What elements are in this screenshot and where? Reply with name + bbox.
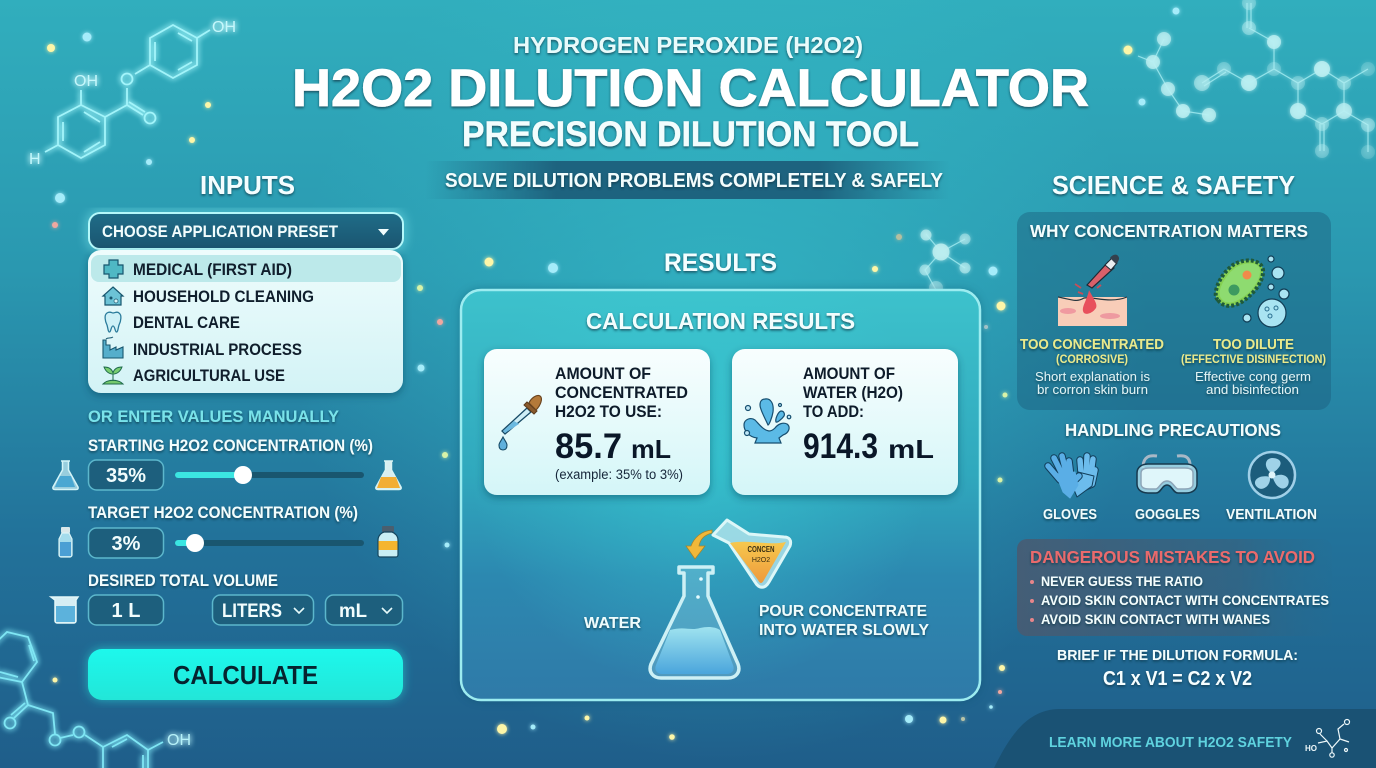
preset: agricultural: AGRICULTURAL USE bbox=[133, 367, 285, 385]
main title: H2O2 DILUTION CALCULATOR bbox=[292, 59, 1089, 118]
dilution formula: C1 x V1 = C2 x V2 bbox=[1103, 668, 1252, 690]
icon: small molecule: HO bbox=[1305, 744, 1317, 753]
card: concentrated h2o2 bbox=[484, 349, 710, 495]
text: too dilute: TOO DILUTE bbox=[1213, 337, 1294, 353]
desired volume control: mL bbox=[339, 601, 367, 622]
label: gloves: GLOVES bbox=[1043, 507, 1097, 523]
card: concentrated h2o2: AMOUNT OF bbox=[555, 364, 651, 383]
icon: skin burn bbox=[1058, 255, 1127, 326]
card: water: 914.3 bbox=[803, 427, 878, 466]
preset dropdown list bbox=[88, 250, 403, 393]
preset: industrial: INDUSTRIAL PROCESS bbox=[133, 341, 302, 359]
molecule: top left: OH bbox=[74, 73, 98, 90]
icon: tilted concentrate flask bbox=[713, 520, 791, 587]
icon: factory bbox=[103, 337, 123, 358]
icon: plant bbox=[103, 367, 123, 384]
icon: ventilation fan bbox=[1249, 452, 1295, 498]
starting concentration control: 35% bbox=[106, 465, 146, 487]
icon: tilted concentrate flask: CONCEN bbox=[748, 545, 775, 554]
card: water: WATER (H2O) bbox=[803, 383, 903, 402]
inputs heading: INPUTS bbox=[200, 170, 295, 200]
tagline band: SOLVE DILUTION PROBLEMS COMPLETELY & SAFELY bbox=[445, 170, 944, 192]
text: too concentrated: Short explanation is bbox=[1035, 370, 1150, 384]
molecule: bottom left bbox=[0, 632, 191, 768]
text: too concentrated: br corron skin burn bbox=[1037, 383, 1148, 397]
preset select: CHOOSE APPLICATION PRESET bbox=[102, 223, 338, 241]
molecule: top left bbox=[29, 19, 236, 168]
card: water: mL bbox=[888, 434, 934, 464]
label: water: WATER bbox=[584, 615, 641, 632]
starting concentration control bbox=[53, 437, 401, 490]
header tool name: PRECISION DILUTION TOOL bbox=[462, 115, 919, 154]
science heading: SCIENCE & SAFETY bbox=[1052, 170, 1295, 200]
icon: tilted concentrate flask: H2O2 bbox=[752, 557, 770, 564]
target concentration control: TARGET H2O2 CONCENTRATION (%) bbox=[88, 504, 358, 522]
panel: handling precautions bbox=[1043, 420, 1317, 523]
header subtitle: HYDROGEN PEROXIDE (H2O2) bbox=[513, 32, 863, 58]
panel: dangerous mistakes bbox=[1017, 539, 1332, 636]
panel: inputs bbox=[51, 170, 403, 700]
panel: dangerous mistakes: DANGEROUS MISTAKES TO AVOID bbox=[1030, 547, 1315, 567]
preset select bbox=[89, 213, 403, 249]
preset: household: HOUSEHOLD CLEANING bbox=[133, 288, 314, 306]
floating particles bbox=[47, 8, 1180, 740]
molecule: top left: OH bbox=[212, 19, 236, 36]
label: pour instruction: POUR CONCENTRATE bbox=[759, 603, 927, 620]
label: pour instruction: INTO WATER SLOWLY bbox=[759, 622, 929, 639]
panel: science and safety bbox=[1017, 170, 1332, 690]
illustration: pouring concentrate into water bbox=[584, 520, 929, 678]
preset: dental: DENTAL CARE bbox=[133, 314, 240, 332]
card: water: TO ADD: bbox=[803, 402, 864, 421]
icon: goggles bbox=[1137, 456, 1197, 493]
card: concentrated h2o2: H2O2 TO USE: bbox=[555, 402, 662, 421]
text: too concentrated bbox=[1020, 337, 1164, 397]
icon: small molecule bbox=[1305, 720, 1350, 757]
panel: dangerous mistakes: AVOID SKIN CONTACT WITH WANES bbox=[1041, 612, 1270, 627]
panel: calculation results bbox=[461, 290, 980, 700]
icon: house bbox=[103, 287, 123, 305]
preset: medical: MEDICAL (FIRST AID) bbox=[133, 261, 292, 279]
text: too concentrated: (CORROSIVE) bbox=[1056, 354, 1128, 366]
dilution formula: BRIEF IF THE DILUTION FORMULA: bbox=[1057, 648, 1298, 664]
card: concentrated h2o2: 85.7 bbox=[555, 427, 622, 466]
panel: dangerous mistakes: AVOID SKIN CONTACT WITH CONCENTRATES bbox=[1041, 593, 1329, 608]
results panel heading: CALCULATION RESULTS bbox=[586, 308, 855, 334]
desired volume control: 1 L bbox=[112, 600, 140, 622]
icon: germ and bubbles bbox=[1216, 256, 1289, 327]
target concentration control: 3% bbox=[112, 533, 141, 555]
label: pour instruction bbox=[759, 603, 929, 639]
text: too dilute: and bisinfection bbox=[1206, 383, 1299, 397]
desired volume control: DESIRED TOTAL VOLUME bbox=[88, 572, 278, 590]
dilution formula bbox=[1057, 648, 1298, 690]
text: too concentrated: TOO CONCENTRATED bbox=[1020, 337, 1164, 353]
panel: why concentration matters: WHY CONCENTRATION MATTERS bbox=[1030, 221, 1308, 241]
molecule: top left: H bbox=[29, 151, 41, 168]
icon: curved arrow bbox=[686, 530, 712, 559]
results heading: RESULTS bbox=[664, 249, 777, 277]
molecule: top right bbox=[1138, 0, 1375, 159]
icon: medical cross bbox=[104, 260, 123, 278]
icon: water flask bbox=[650, 567, 739, 678]
desired volume control: LITERS bbox=[222, 601, 282, 622]
icon: water splash bbox=[744, 399, 791, 443]
text: too dilute bbox=[1181, 337, 1326, 397]
card: concentrated h2o2: mL bbox=[631, 434, 671, 464]
icon: tooth bbox=[105, 312, 121, 332]
card: concentrated h2o2: CONCENTRATED bbox=[555, 383, 688, 402]
icon: gloves bbox=[1048, 456, 1095, 498]
icon: dropper bbox=[499, 395, 541, 450]
text: too dilute: Effective cong germ bbox=[1195, 370, 1311, 384]
desired volume control bbox=[51, 572, 402, 625]
molecule: centre right bbox=[920, 230, 970, 295]
tagline band bbox=[425, 161, 950, 199]
calculate button: CALCULATE bbox=[173, 660, 318, 690]
panel: dangerous mistakes: NEVER GUESS THE RATIO bbox=[1041, 574, 1203, 589]
label: ventilation: VENTILATION bbox=[1226, 507, 1317, 523]
panel: handling precautions: HANDLING PRECAUTIONS bbox=[1065, 420, 1281, 440]
calculate button bbox=[88, 649, 403, 700]
card: concentrated h2o2: (example: 35% to 3%) bbox=[555, 467, 683, 482]
footer link band: LEARN MORE ABOUT H2O2 SAFETY bbox=[1049, 735, 1292, 751]
target concentration control bbox=[59, 504, 398, 558]
card: water bbox=[732, 349, 958, 495]
starting concentration control: STARTING H2O2 CONCENTRATION (%) bbox=[88, 437, 373, 455]
text: too dilute: (EFFECTIVE DISINFECTION) bbox=[1181, 354, 1326, 366]
label: goggles: GOGGLES bbox=[1135, 507, 1200, 523]
molecule: bottom left: OH bbox=[167, 732, 191, 749]
manual entry heading: OR ENTER VALUES MANUALLY bbox=[88, 407, 340, 426]
footer link band bbox=[994, 709, 1376, 768]
panel: why concentration matters bbox=[1017, 212, 1331, 410]
card: water: AMOUNT OF bbox=[803, 364, 895, 383]
